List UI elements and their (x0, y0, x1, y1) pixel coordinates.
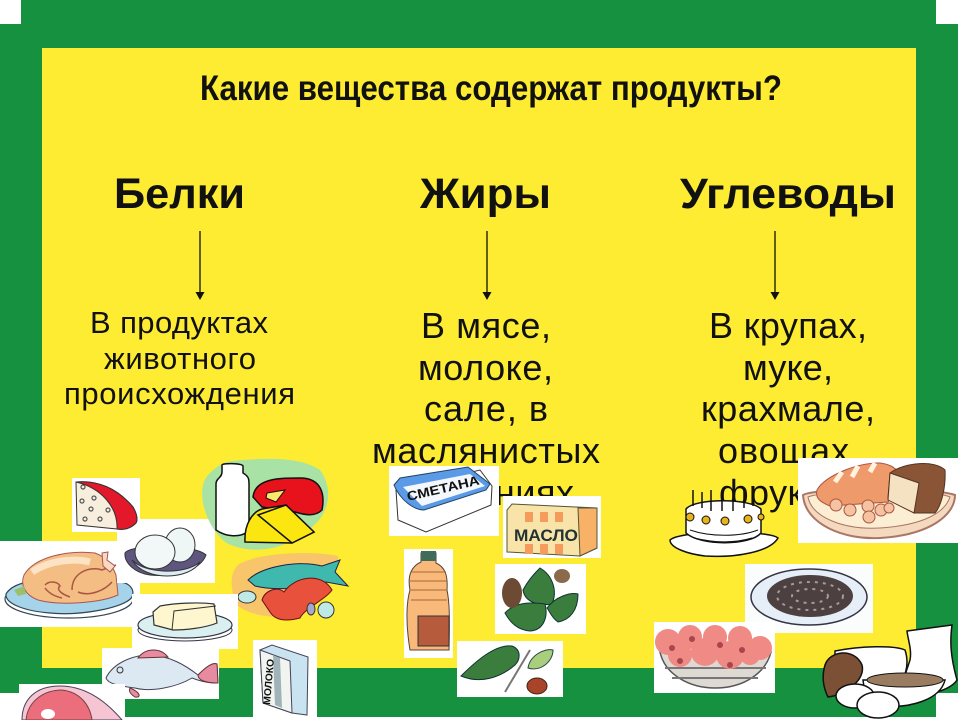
text block: protein sources: В продуктах (90, 305, 268, 340)
food: basket of pink pastries (654, 622, 775, 693)
text block: fat sources: В мясе, (421, 305, 551, 346)
food: ham slice (19, 684, 125, 720)
arrow: carbohydrates (770, 231, 780, 300)
food: fish (102, 648, 219, 699)
food: milk carton: МОЛОКО (262, 658, 277, 705)
food: eggs on a plate (117, 519, 215, 583)
food: sour cream tub: СМЕТАНА (405, 473, 481, 504)
food: fish and lobster seafood group (232, 553, 348, 620)
text block: carbohydrate sources: крахмале, (701, 388, 875, 429)
food: milk carton (253, 640, 317, 720)
text block: protein sources (64, 305, 295, 411)
food: butter pack (503, 496, 601, 558)
food: plate of buckwheat (745, 564, 873, 633)
text block: carbohydrate sources: овощах, (718, 430, 860, 471)
arrow: proteins (196, 231, 204, 300)
food: hazel leaf and nut (457, 641, 563, 697)
text block: carbohydrate sources: муке, (743, 347, 833, 388)
text block: fat sources: молоке, (418, 347, 553, 388)
food: birthday cake (670, 490, 778, 556)
food: butter on a dish (132, 594, 238, 649)
food: bread, jug and bowl of porridge (823, 625, 957, 718)
food: basket of bread (798, 458, 958, 543)
food: hazelnut branch (495, 564, 586, 634)
text block: protein sources: происхождения (64, 376, 295, 411)
arrow: fats (482, 231, 492, 300)
food: bottle of milk and cheese on green blob (202, 459, 328, 550)
food: bottle of sunflower oil (404, 549, 453, 658)
text block: carbohydrate sources: фруктах (719, 472, 859, 513)
text block: carbohydrate sources: В крупах, (709, 305, 867, 346)
food: roast chicken on a plate (0, 541, 140, 627)
column heading: fats: Жиры (419, 170, 551, 218)
text block: fat sources: сале, в (424, 388, 548, 429)
text block: protein sources: животного (104, 341, 256, 376)
food: butter pack: МАСЛО (514, 526, 578, 545)
title: Какие вещества содержат продукты? (200, 69, 782, 108)
text block: fat sources: растениях (398, 472, 574, 513)
text block: carbohydrate sources (701, 305, 875, 513)
column heading: proteins: Белки (114, 170, 245, 218)
column heading: carbohydrates: Углеводы (680, 170, 896, 218)
text block: fat sources (372, 305, 600, 513)
food: red-rind cheese wedge (72, 478, 140, 532)
text block: fat sources: маслянистых (372, 430, 600, 471)
food: sour cream tub (389, 466, 499, 536)
yellow central panel (42, 48, 916, 668)
